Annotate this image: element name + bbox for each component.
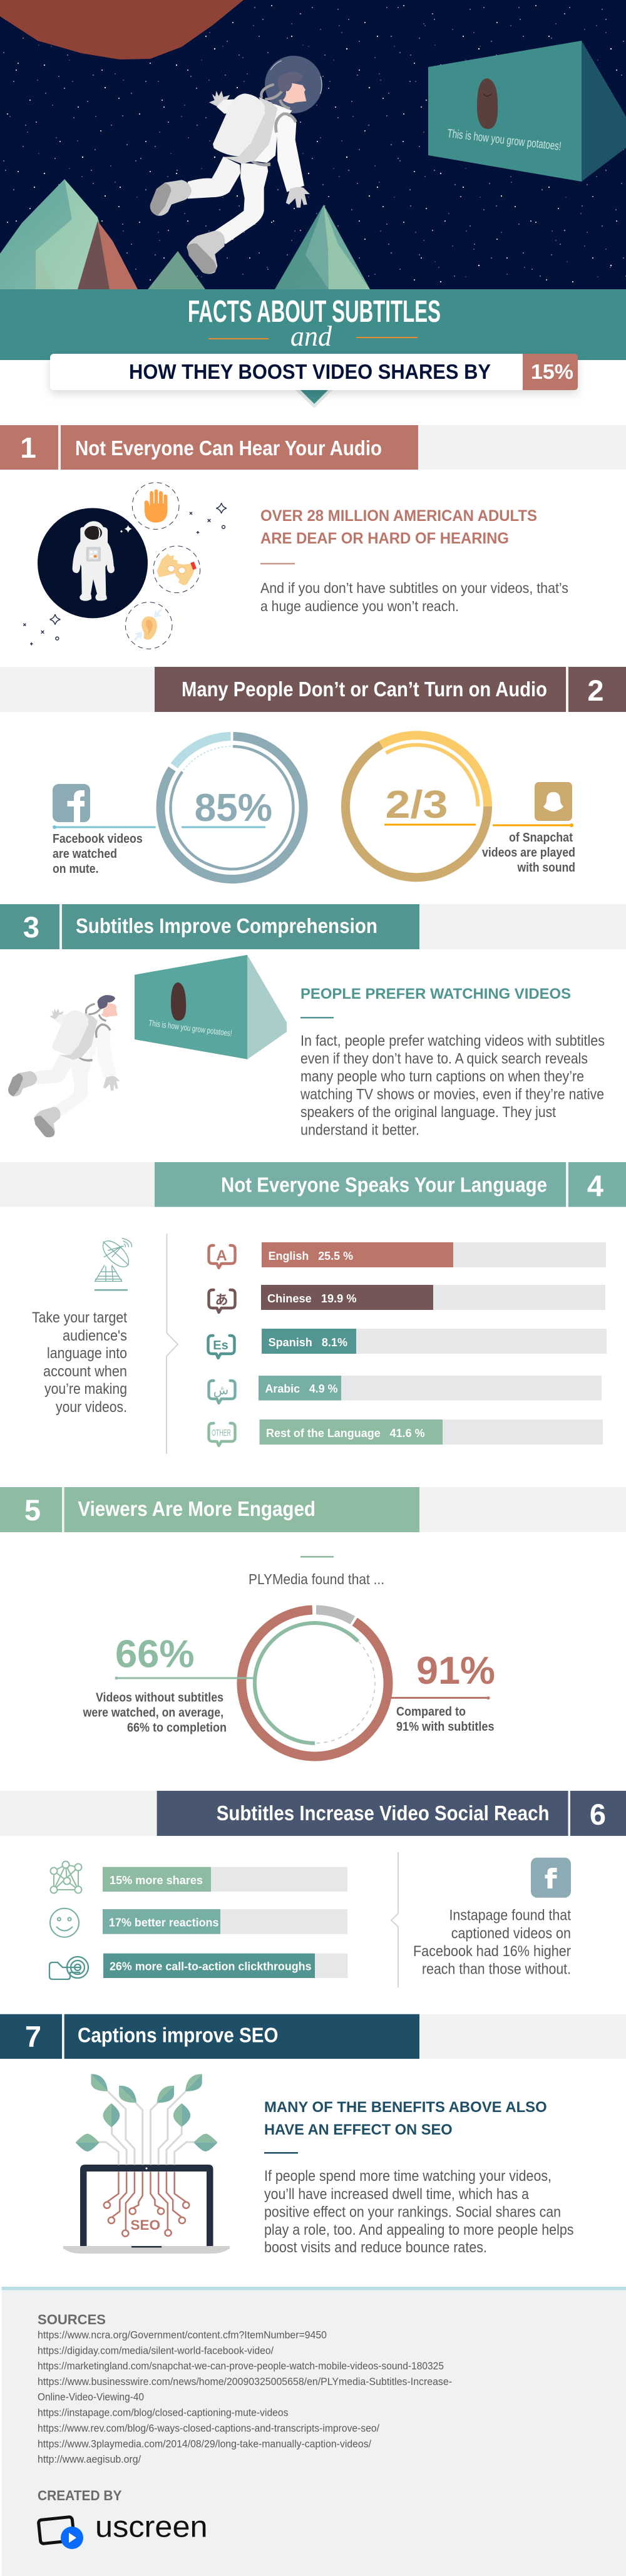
subtitle banner bbox=[50, 354, 578, 390]
mountains left bbox=[0, 179, 205, 289]
section 3 body: even if they don’t have to. A quick search reveals bbox=[300, 1051, 588, 1067]
video screen: This is how you grow potatoes! bbox=[148, 1018, 232, 1038]
section 7 body: you’ll have increased dwell time, which has a bbox=[264, 2186, 530, 2203]
facebook caption: Facebook videos bbox=[53, 832, 143, 846]
facebook caption: are watched bbox=[53, 847, 117, 861]
decorative stars bbox=[23, 503, 227, 646]
completion donut bbox=[242, 1610, 388, 1756]
uscreen logo bbox=[38, 2511, 208, 2549]
bar: English: English 25.5 % bbox=[269, 1250, 353, 1262]
section 7 heading bbox=[264, 2099, 547, 2138]
bar: Rest of the Language: Rest of the Language 41.6 % bbox=[266, 1427, 425, 1440]
sources list: https://instapage.com/blog/closed-captioning-mute-videos bbox=[38, 2407, 288, 2419]
section 3 body bbox=[300, 1033, 605, 1138]
15% badge bbox=[523, 354, 578, 390]
bar: Rest of the Language: OTHER bbox=[212, 1428, 231, 1438]
section 7 header: Captions improve SEO bbox=[78, 2024, 278, 2047]
bar: clickthroughs: 26% more call-to-action clickthroughs bbox=[110, 1960, 312, 1973]
laptop bbox=[63, 2165, 230, 2254]
section 4 header bbox=[0, 1162, 626, 1207]
hero illustration bbox=[0, 0, 626, 289]
66% callout bbox=[83, 1633, 255, 1735]
section 6 text: Facebook had 16% higher bbox=[413, 1943, 571, 1960]
section 1 body: a huge audience you won’t reach. bbox=[260, 598, 459, 614]
mountain right bbox=[275, 205, 370, 289]
section 4 left text: account when bbox=[43, 1363, 127, 1380]
section 3 header: 3 bbox=[23, 910, 39, 944]
snapchat caption: videos are played bbox=[482, 846, 575, 860]
icon: ear bbox=[133, 609, 162, 641]
sources list: Online-Video-Viewing-40 bbox=[38, 2391, 144, 2403]
15% badge: 15% bbox=[531, 360, 573, 383]
bar: English: A bbox=[216, 1247, 227, 1264]
floating video screen: This is how you grow potatoes! bbox=[446, 127, 562, 153]
bar: Arabic: Arabic 4.9 % bbox=[265, 1383, 338, 1395]
section 5 header bbox=[0, 1487, 626, 1532]
section 4 left text: your videos. bbox=[56, 1399, 127, 1416]
section 4 header: Not Everyone Speaks Your Language bbox=[221, 1173, 547, 1196]
section 6 text: captioned videos on bbox=[451, 1925, 571, 1942]
icon: click hand bbox=[49, 1957, 88, 1979]
bar: Chinese: あ bbox=[215, 1293, 228, 1307]
section 7 body: positive effect on your rankings. Social shares can bbox=[264, 2204, 561, 2221]
social bars bbox=[103, 1867, 348, 1978]
icon: hand bbox=[145, 489, 167, 523]
bar: Spanish: Spanish 8.1% bbox=[269, 1336, 347, 1349]
section 6 header bbox=[0, 1791, 626, 1836]
bar: reactions bbox=[103, 1909, 347, 1934]
section 3 header: Subtitles Improve Comprehension bbox=[76, 914, 377, 937]
created by heading: CREATED BY bbox=[38, 2488, 122, 2503]
section 4 left text: audience's bbox=[63, 1327, 127, 1344]
snapchat caption: with sound bbox=[517, 861, 575, 875]
section 4 left text: language into bbox=[47, 1345, 127, 1362]
section 7 header bbox=[0, 2014, 626, 2059]
subtitle banner: HOW THEY BOOST VIDEO SHARES BY bbox=[129, 360, 491, 383]
section 6 text bbox=[413, 1907, 571, 1978]
facebook caption: on mute. bbox=[53, 862, 99, 876]
section 1 header bbox=[0, 425, 626, 470]
section 7 body: play a role, too. And appealing to more people helps bbox=[264, 2222, 573, 2239]
icon: facebook bbox=[53, 784, 90, 822]
section 6 header: Subtitles Increase Video Social Reach bbox=[217, 1801, 550, 1825]
section 1 heading bbox=[260, 507, 537, 547]
bar: shares bbox=[103, 1867, 347, 1892]
section 5 intro: PLYMedia found that ... bbox=[249, 1571, 384, 1587]
bar: clickthroughs bbox=[103, 1954, 348, 1978]
section 2 header: 2 bbox=[587, 674, 604, 707]
astronaut with helmet bbox=[150, 56, 322, 274]
bar: English bbox=[209, 1242, 606, 1268]
snapchat caption bbox=[482, 823, 575, 875]
section 2 header: Many People Don’t or Can’t Turn on Audio bbox=[182, 677, 547, 701]
bar: reactions: 17% better reactions bbox=[109, 1917, 219, 1929]
section 7 body: boost visits and reduce bounce rates. bbox=[264, 2239, 487, 2256]
section 1 text bbox=[260, 507, 568, 614]
sources heading: SOURCES bbox=[38, 2312, 106, 2327]
66% callout: were watched, on average, bbox=[83, 1706, 223, 1720]
section 7 body: If people spend more time watching your videos, bbox=[264, 2168, 552, 2185]
section 4 left text: Take your target bbox=[32, 1309, 127, 1326]
sources list: https://www.rev.com/blog/6-ways-closed-captions-and-transcripts-improve-seo/ bbox=[38, 2422, 379, 2434]
bar: Arabic: ش bbox=[213, 1383, 228, 1398]
planet bbox=[0, 0, 244, 59]
section 1 body bbox=[260, 580, 568, 614]
title band bbox=[0, 289, 626, 360]
snapchat 2/3 donut bbox=[346, 735, 488, 877]
facebook caption bbox=[53, 825, 156, 876]
bar: Spanish: Es bbox=[213, 1339, 228, 1352]
icon: smiley bbox=[50, 1909, 79, 1937]
bar: Arabic bbox=[209, 1376, 602, 1403]
section 7 heading: HAVE AN EFFECT ON SEO bbox=[264, 2121, 453, 2138]
section 3 body: speakers of the original language. They just bbox=[300, 1104, 556, 1121]
footer panel bbox=[1, 2287, 626, 2576]
bar: shares: 15% more shares bbox=[110, 1874, 203, 1887]
facebook 85% donut: 85% bbox=[195, 786, 272, 830]
66% callout: 66% bbox=[115, 1633, 195, 1676]
icon: sign language hands bbox=[157, 554, 197, 585]
section 3 body: many people who turn captions on when they’re bbox=[300, 1068, 584, 1085]
and script word with rules: and bbox=[290, 320, 332, 352]
sources list: http://www.aegisub.org/ bbox=[38, 2453, 141, 2465]
icon: network bbox=[50, 1861, 81, 1893]
section 3 text bbox=[300, 986, 605, 1138]
bar: Chinese: Chinese 19.9 % bbox=[267, 1292, 357, 1305]
section 3 body: understand it better. bbox=[300, 1122, 419, 1138]
bar: Rest of the Language bbox=[209, 1419, 603, 1446]
section 1 illustration bbox=[23, 483, 227, 649]
section 7 header: 7 bbox=[25, 2020, 41, 2053]
laptop SEO tree illustration: SEO bbox=[130, 2217, 160, 2233]
icon: satellite dish bbox=[95, 1238, 134, 1281]
section 6 text: Instapage found that bbox=[449, 1907, 571, 1924]
icon: snapchat bbox=[535, 782, 572, 821]
section 4 left text: you’re making bbox=[44, 1381, 127, 1398]
icon: facebook bbox=[531, 1858, 571, 1898]
section 3 text: PEOPLE PREFER WATCHING VIDEOS bbox=[300, 986, 571, 1002]
laptop SEO tree illustration bbox=[63, 2074, 230, 2254]
section 6 text: reach than those without. bbox=[422, 1961, 571, 1978]
section 1 heading: ARE DEAF OR HARD OF HEARING bbox=[260, 530, 509, 547]
section 1 header: 1 bbox=[20, 431, 36, 464]
floating video screen bbox=[428, 41, 626, 182]
sources list: https://digiday.com/media/silent-world-facebook-video/ bbox=[38, 2344, 274, 2356]
section 2 header bbox=[0, 667, 626, 712]
66% callout: Videos without subtitles bbox=[96, 1691, 223, 1705]
sources list: https://marketingland.com/snapchat-we-can-prove-people-watch-mobile-videos-sound-180325 bbox=[38, 2360, 444, 2372]
sources list: https://www.3playmedia.com/2014/08/29/long-take-manually-caption-videos/ bbox=[38, 2438, 371, 2450]
bar: Spanish bbox=[208, 1329, 607, 1358]
section 4 header: 4 bbox=[587, 1169, 603, 1202]
section 5 header: 5 bbox=[24, 1493, 41, 1527]
section 3 header bbox=[0, 904, 626, 949]
section 6 header: 6 bbox=[590, 1798, 606, 1831]
sources list bbox=[38, 2329, 452, 2465]
91% callout: 91% bbox=[416, 1649, 495, 1692]
sources list: https://www.ncra.org/Government/content.cfm?ItemNumber=9450 bbox=[38, 2329, 327, 2341]
snapchat 2/3 donut: 2/3 bbox=[386, 783, 448, 827]
tree branches bbox=[98, 2091, 196, 2165]
section 1 heading: OVER 28 MILLION AMERICAN ADULTS bbox=[260, 507, 537, 525]
91% callout: 91% with subtitles bbox=[396, 1720, 495, 1734]
leaves bbox=[76, 2074, 218, 2151]
91% callout bbox=[391, 1649, 495, 1734]
section 1 header: Not Everyone Can Hear Your Audio bbox=[75, 436, 382, 460]
snapchat caption: of Snapchat bbox=[509, 831, 573, 845]
language bars bbox=[208, 1242, 607, 1446]
bar: Chinese bbox=[209, 1285, 605, 1312]
section 4 left text bbox=[32, 1289, 128, 1416]
astronaut without helmet bbox=[8, 995, 120, 1138]
uscreen logo: uscreen bbox=[95, 2511, 208, 2544]
main title: FACTS ABOUT SUBTITLES bbox=[188, 295, 441, 329]
sources list: https://www.businesswire.com/news/home/20090325005658/en/PLYmedia-Subtitles-Increase- bbox=[38, 2376, 452, 2388]
facebook 85% donut bbox=[161, 736, 304, 879]
section 7 body bbox=[264, 2168, 573, 2256]
91% callout: Compared to bbox=[396, 1705, 466, 1719]
circuit lines bbox=[104, 2172, 189, 2237]
section 5 header: Viewers Are More Engaged bbox=[78, 1497, 316, 1520]
section 7 heading: MANY OF THE BENEFITS ABOVE ALSO bbox=[264, 2099, 547, 2116]
66% callout: 66% to completion bbox=[127, 1721, 227, 1735]
video screen bbox=[135, 955, 287, 1059]
banner pointer bbox=[295, 390, 332, 408]
section 1 body: And if you don’t have subtitles on your videos, that’s bbox=[260, 580, 568, 596]
section 7 text bbox=[264, 2099, 573, 2256]
